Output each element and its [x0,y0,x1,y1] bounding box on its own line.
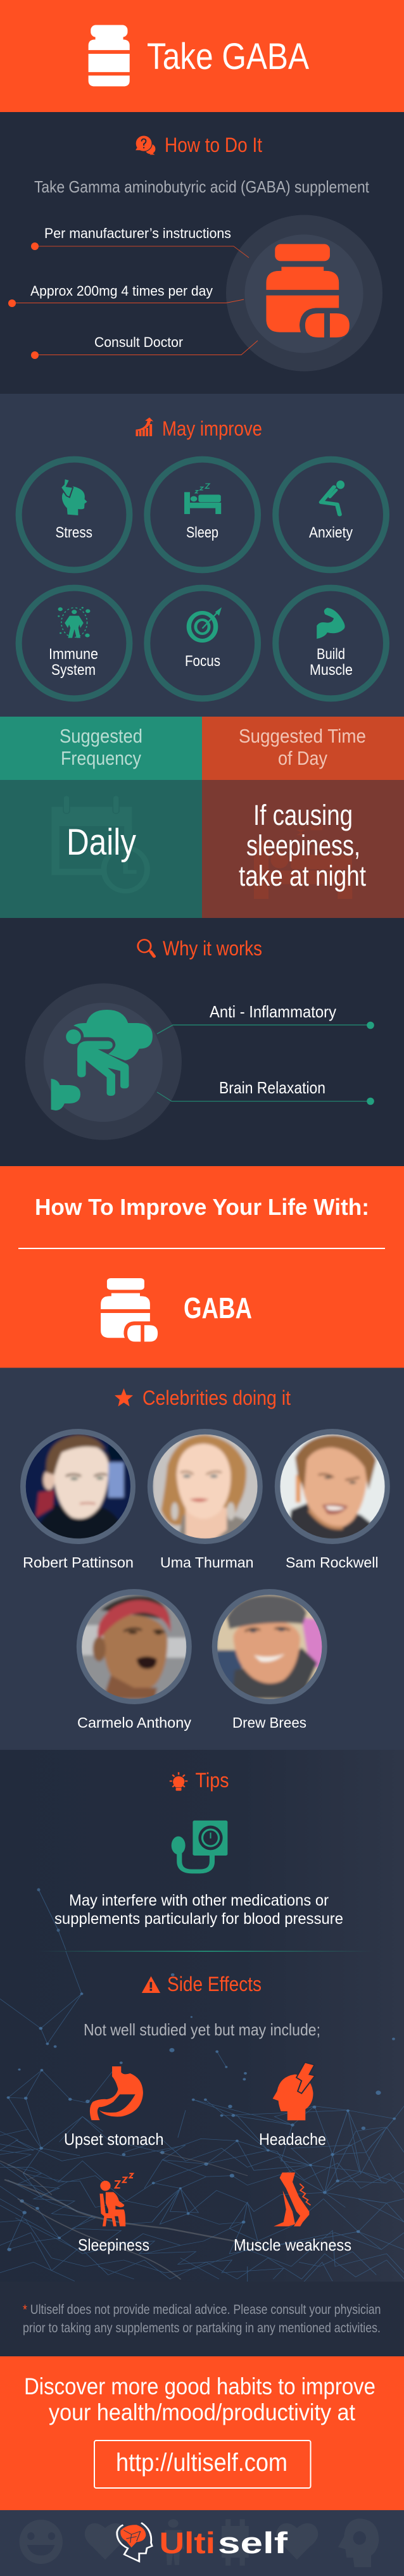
text: discover more: your health/mood/productivity at [49,2399,356,2425]
benefit: focus: Focus [185,653,220,670]
heading: why it works: Why it works [163,937,262,960]
callout: approx 200mg [8,283,244,307]
callout: anti-inflammatory [157,1002,374,1034]
portrait: uma thurman [148,1429,263,1544]
panel: call to action [0,2356,404,2510]
label: drew brees: Drew Brees [232,1714,306,1731]
heading: may improve: May improve [162,417,262,440]
section: tips [54,1769,343,1928]
benefit: stress: Stress [56,524,92,541]
diagram: person carrying cloud [25,983,182,1140]
benefit: anxiety [275,460,386,570]
portrait: drew brees [212,1589,327,1704]
callout: approx 200mg: Approx 200mg 4 times per day [30,283,213,299]
label: carmelo anthony: Carmelo Anthony [77,1714,192,1731]
heading: how to improve your life with: How To Improve Your Life With: [35,1194,369,1220]
benefit: immune system: Immune [49,646,98,663]
callout: consult doctor: Consult Doctor [94,334,183,350]
text: not well studied: Not well studied yet but may include; [84,2020,320,2039]
side effect: muscle weakness: Muscle weakness [234,2235,351,2254]
benefit: build muscle [275,588,386,698]
side effect: upset stomach [64,2066,163,2149]
background network stray line in tips [37,1888,66,1950]
label: GABA: GABA [184,1291,252,1324]
portrait: robert pattinson [20,1429,136,1544]
icon: orange supplement bottle [266,244,350,337]
value: daily: Daily [66,822,136,863]
benefit: sleep: Sleep [186,524,218,541]
panel: title header [0,0,404,112]
side effect: sleepiness [78,2173,149,2254]
background network wave [0,2152,258,2279]
logo: ultiself: Ulti [160,2526,215,2560]
label: suggested frequency: Suggested [60,725,142,747]
icons: faint background icons [20,2518,379,2567]
portrait: carmelo anthony [77,1589,192,1704]
side effect: headache: Headache [259,2130,326,2149]
logo: ultiself: self [218,2526,287,2560]
background network nodes [7,1973,396,2251]
icon: growth chart arrow [136,417,153,436]
callout: brain relaxation: Brain Relaxation [219,1078,325,1097]
label: suggested time of day [239,725,366,769]
value: if causing sleepiness: sleepiness, [246,829,360,862]
button: website link: http://ultiself.com [116,2449,287,2477]
label: robert pattinson: Robert Pattinson [23,1554,134,1571]
label: suggested frequency [60,725,142,769]
icon: star [115,1388,133,1407]
callout: consult doctor [31,334,258,359]
benefit: build muscle: Build [317,646,345,663]
title: Take GABA [147,36,309,77]
icon: white bottle with pill [101,1278,158,1341]
panel: celebrities [0,1367,404,1750]
benefit: anxiety: Anxiety [309,524,353,541]
diagram: bottle in circles [226,215,382,371]
panel: may improve [0,394,404,717]
panel: disclaimer [0,2282,404,2356]
text: interaction warning: supplements particularly for blood pressure [54,1910,343,1928]
text: discover more [24,2373,376,2425]
heading: how to do it: How to Do It [165,134,262,156]
icon: faint calendar and clock [51,796,147,891]
heading: tips: Tips [195,1769,229,1792]
icon: warning triangle [142,1976,160,1993]
label: suggested time of day: Suggested Time [239,725,366,747]
icon: light bulb [170,1772,187,1791]
icon: faint bed [254,826,352,899]
side effect: muscle weakness [234,2173,351,2254]
heading: celebrities doing it: Celebrities doing it [142,1386,291,1409]
label: uma thurman: Uma Thurman [160,1554,253,1571]
callout: per manufacturer's instructions [31,225,249,258]
callout: brain relaxation [157,1078,374,1105]
panel: how to do it [0,112,404,394]
callout: anti-inflammatory: Anti - Inflammatory [210,1002,336,1021]
icon: white supplement bottle [89,25,130,86]
side effect: upset stomach: Upset stomach [64,2130,163,2149]
side effect: sleepiness: Sleepiness [78,2235,149,2254]
text: interaction warning [54,1892,343,1928]
benefit: build muscle: Muscle [310,662,353,679]
benefit: focus [147,588,258,698]
heading: side effects: Side Effects [167,1973,262,1995]
background network pattern [0,1951,404,2282]
icon: blood pressure monitor [172,1821,227,1871]
value: if causing sleepiness: If causing [253,799,353,831]
portrait: sam rockwell [275,1429,390,1544]
benefit: stress [19,460,129,570]
panel: suggested frequency [0,717,202,918]
icon: question speech bubbles [136,135,155,154]
value: if causing sleepiness: take at night [239,860,366,892]
icon: magnifying glass [138,939,154,957]
value: if causing sleepiness [239,799,366,892]
panel: why it works [0,918,404,1166]
callout: per manufacturer's instructions: Per manufacturer’s instructions [44,225,231,241]
label: suggested frequency: Frequency [61,747,141,769]
label: sam rockwell: Sam Rockwell [286,1554,379,1571]
panel: how to improve your life [0,1166,404,1367]
text: interaction warning: May interfere with other medications or [69,1892,329,1909]
panel: tips and side effects background [0,1750,404,2282]
section: side effects [64,1973,351,2254]
button: website link [94,2441,310,2488]
benefit: sleep [147,460,258,570]
benefit: immune system: System [51,662,96,679]
logo: ultiself [117,2523,287,2561]
label: suggested time of day: of Day [278,747,327,769]
panel: footer [0,2510,404,2576]
side effect: headache [259,2063,326,2149]
panel: suggested time of day [202,717,404,918]
benefit: immune system [19,588,129,698]
